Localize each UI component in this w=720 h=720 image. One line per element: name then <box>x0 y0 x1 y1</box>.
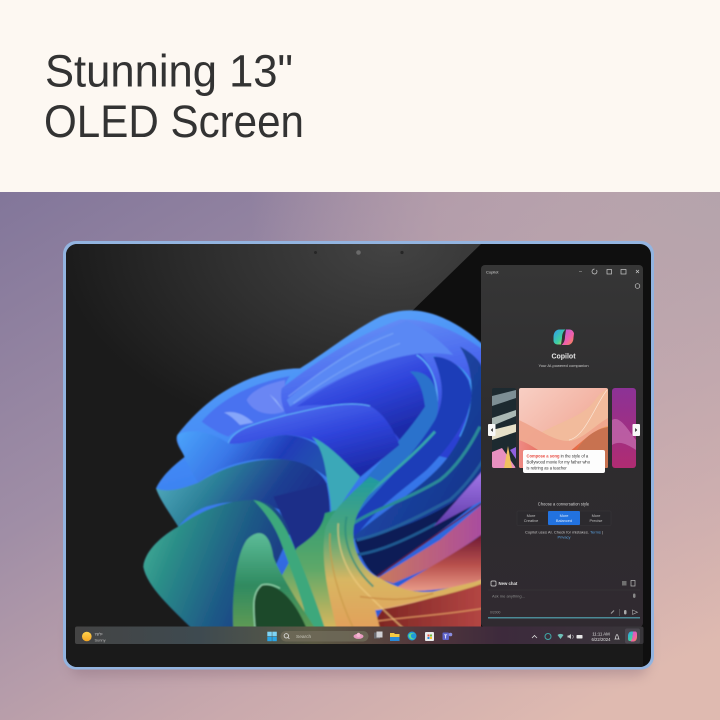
green petal <box>143 500 290 628</box>
conversation style <box>517 502 611 526</box>
taskbar app icons: T <box>444 634 447 640</box>
conversation style: More <box>527 513 535 518</box>
weather widget <box>82 632 106 642</box>
icon: taskbar copilot <box>625 628 640 644</box>
prompt caption: Compose a song in the style of a <box>526 454 589 458</box>
chat input: 0/2000 <box>490 610 500 614</box>
carousel left card <box>492 388 516 468</box>
copilot panel <box>481 265 643 627</box>
taskbar app icons <box>374 632 452 641</box>
header background <box>0 0 720 192</box>
chat input <box>488 580 640 618</box>
system tray: 11:11 AM <box>592 632 610 636</box>
red petal <box>393 533 483 591</box>
weather widget: 78°F <box>94 632 103 636</box>
black bezel and display glass <box>66 244 651 667</box>
title <box>44 46 304 147</box>
inner green <box>233 533 315 628</box>
camera sensors <box>314 250 404 255</box>
weather widget: Sunny <box>94 637 106 642</box>
system tray: 6/22/2024 <box>591 637 611 642</box>
blue band over <box>178 432 328 478</box>
icon: windows start <box>267 632 277 641</box>
dark petal hollow <box>274 492 320 550</box>
conversation style: More <box>560 513 568 518</box>
dark fan centre <box>354 500 472 577</box>
search box <box>280 631 368 642</box>
taskbar <box>75 626 644 644</box>
disclaimer <box>525 530 603 539</box>
green column <box>281 510 338 626</box>
teal ribbon <box>312 436 360 512</box>
mid blue petal <box>228 404 399 480</box>
blue frame <box>63 241 654 670</box>
tagline: Your AI-powered companion <box>538 363 589 368</box>
lower red petal <box>376 583 481 626</box>
central swirl <box>324 477 483 628</box>
title: Stunning 13" <box>45 46 293 96</box>
prompt caption: Bollywood movie for my father who <box>526 460 591 464</box>
silhouette <box>143 310 483 628</box>
conversation style: Choose a conversation style <box>538 502 590 506</box>
upper petal folds <box>281 319 483 467</box>
device shadow <box>70 610 648 676</box>
disclaimer: Copilot uses AI. Check for mistakes. Terms | <box>525 530 603 534</box>
pink petal <box>377 503 483 583</box>
carousel right card <box>612 388 636 468</box>
tablet device <box>63 241 654 670</box>
chat input: New chat <box>498 581 518 586</box>
icon: copilot logo <box>554 330 574 345</box>
teal petal <box>156 459 330 530</box>
title: OLED Screen <box>44 96 304 147</box>
teal stripes in fan <box>353 427 480 523</box>
conversation style: More <box>592 513 600 518</box>
carousel arrows <box>488 424 640 436</box>
purple petal <box>433 470 483 527</box>
conversation style: Balanced <box>556 518 572 523</box>
panel title bar <box>486 269 640 288</box>
right side blue ribbons <box>358 371 438 512</box>
system tray <box>532 632 619 642</box>
top left rosette <box>202 376 290 437</box>
flower illustration <box>143 310 483 628</box>
chat input: Ask me anything... <box>492 593 525 598</box>
conversation style: Creative <box>524 518 538 523</box>
panel title bar: Copilot <box>486 270 499 274</box>
gradient backdrop <box>0 192 720 720</box>
prompt caption: is retiring as a teacher <box>526 466 567 470</box>
conversation style: Precise <box>590 518 602 523</box>
search box: Search <box>296 634 312 640</box>
disclaimer: Privacy <box>557 534 571 539</box>
carousel main card <box>519 388 608 468</box>
copilot heading: Copilot <box>551 354 576 360</box>
prompt caption <box>523 450 605 473</box>
